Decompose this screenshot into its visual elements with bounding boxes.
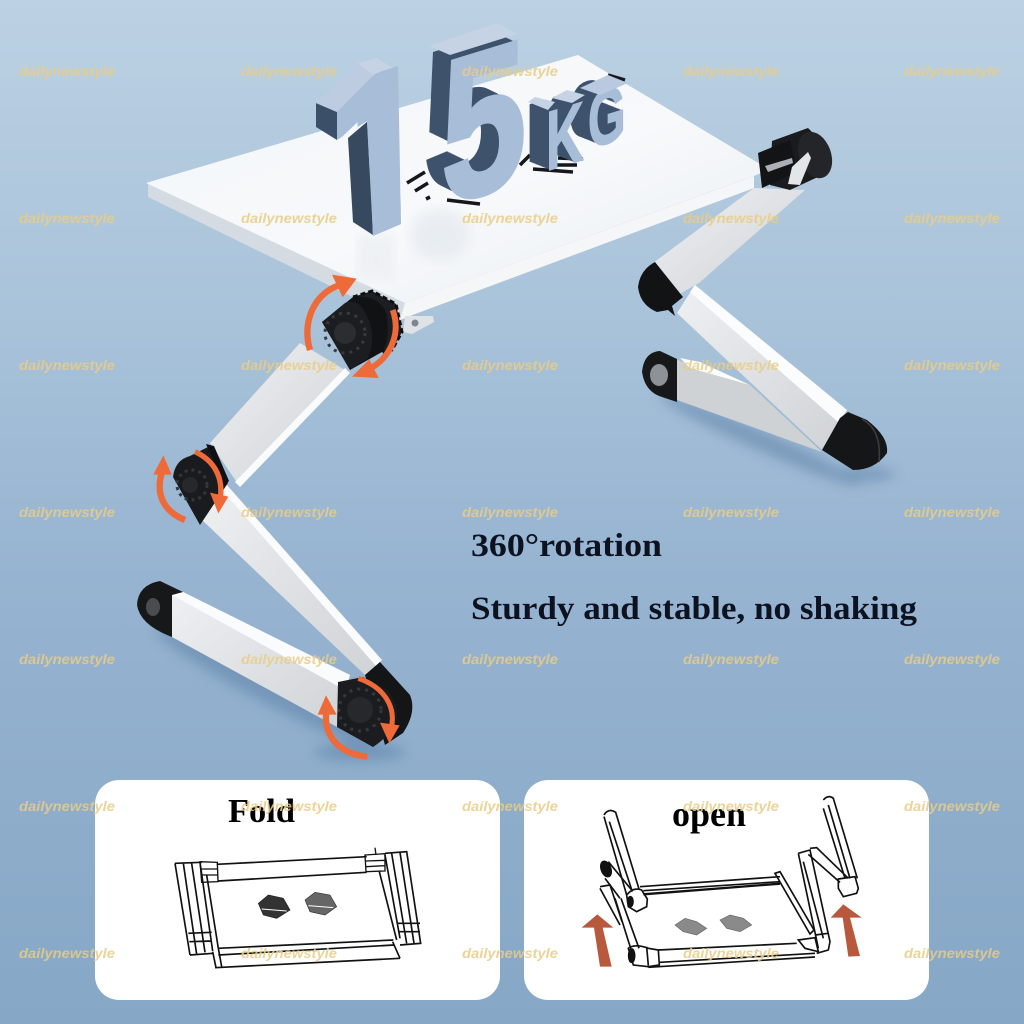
hatch marks under digits [407, 75, 625, 204]
diagram: folded table [175, 848, 421, 968]
watermarks: dailynewstyle [241, 651, 337, 667]
right upper arm [653, 188, 805, 296]
watermarks: dailynewstyle [19, 798, 115, 814]
digit one face: 1 [311, 11, 436, 303]
watermarks: dailynewstyle [19, 651, 115, 667]
right long arm [677, 285, 847, 450]
watermarks: dailynewstyle [241, 798, 337, 814]
watermarks: dailynewstyle [683, 357, 779, 373]
left middle arm [202, 483, 382, 675]
left upper arm [210, 343, 350, 487]
digit one sides [316, 58, 396, 235]
watermarks: dailynewstyle [904, 357, 1000, 373]
watermarks: dailynewstyle [683, 798, 779, 814]
diagram: opened table [582, 797, 862, 967]
floor shadows [149, 386, 895, 763]
label: open: open [672, 794, 746, 834]
watermarks: dailynewstyle [462, 357, 558, 373]
letter G: G [588, 66, 626, 166]
watermarks: dailynewstyle [683, 945, 779, 961]
orange rotation arrows [153, 275, 400, 757]
left middle joint [173, 444, 229, 525]
watermarks: dailynewstyle [462, 798, 558, 814]
right foot cap [822, 412, 887, 470]
watermarks: dailynewstyle [462, 945, 558, 961]
watermarks: dailynewstyle [904, 210, 1000, 226]
watermarks: dailynewstyle [904, 798, 1000, 814]
watermarks: dailynewstyle [241, 357, 337, 373]
left top hinge joint [322, 291, 402, 370]
watermarks: dailynewstyle [904, 504, 1000, 520]
right elbow cap [638, 262, 683, 316]
right hinge joint [758, 127, 838, 190]
hinge bracket [403, 316, 434, 334]
watermarks: dailynewstyle [462, 504, 558, 520]
left lower arm [137, 581, 350, 727]
watermarks: dailynewstyle [19, 63, 115, 79]
left foot joint [337, 662, 412, 747]
table top [146, 55, 770, 320]
watermarks: dailynewstyle [19, 210, 115, 226]
panel: open card [524, 780, 929, 1000]
watermarks: dailynewstyle [904, 651, 1000, 667]
digit 5: 5 [441, 0, 527, 250]
panel: fold card [95, 780, 500, 1000]
watermarks: dailynewstyle [683, 504, 779, 520]
watermarks: dailynewstyle [19, 504, 115, 520]
watermarks: dailynewstyle [462, 63, 558, 79]
watermarks: dailynewstyle [241, 63, 337, 79]
watermarks: dailynewstyle [904, 945, 1000, 961]
watermarks: dailynewstyle [241, 504, 337, 520]
top bevels of 5 K G [429, 23, 628, 110]
right short lower arm [642, 351, 822, 452]
letter K: K [546, 83, 584, 189]
caption: sturdy and stable: Sturdy and stable, no shaking [471, 591, 918, 627]
watermarks: dailynewstyle [241, 210, 337, 226]
watermarks: dailynewstyle [241, 945, 337, 961]
panel: left table legs [137, 343, 412, 747]
watermarks: dailynewstyle [462, 651, 558, 667]
watermarks: dailynewstyle [904, 63, 1000, 79]
panel: right table legs [638, 188, 887, 470]
caption: 360 rotation: 360°rotation [471, 528, 662, 564]
arrow: left up [582, 914, 613, 967]
watermarks: dailynewstyle [19, 357, 115, 373]
watermarks: dailynewstyle [683, 210, 779, 226]
watermarks: dailynewstyle [19, 945, 115, 961]
watermarks: dailynewstyle [462, 210, 558, 226]
watermarks: dailynewstyle [683, 651, 779, 667]
watermarks: dailynewstyle [683, 63, 779, 79]
label: Fold: Fold [228, 793, 295, 830]
arrow: right up [831, 904, 862, 957]
